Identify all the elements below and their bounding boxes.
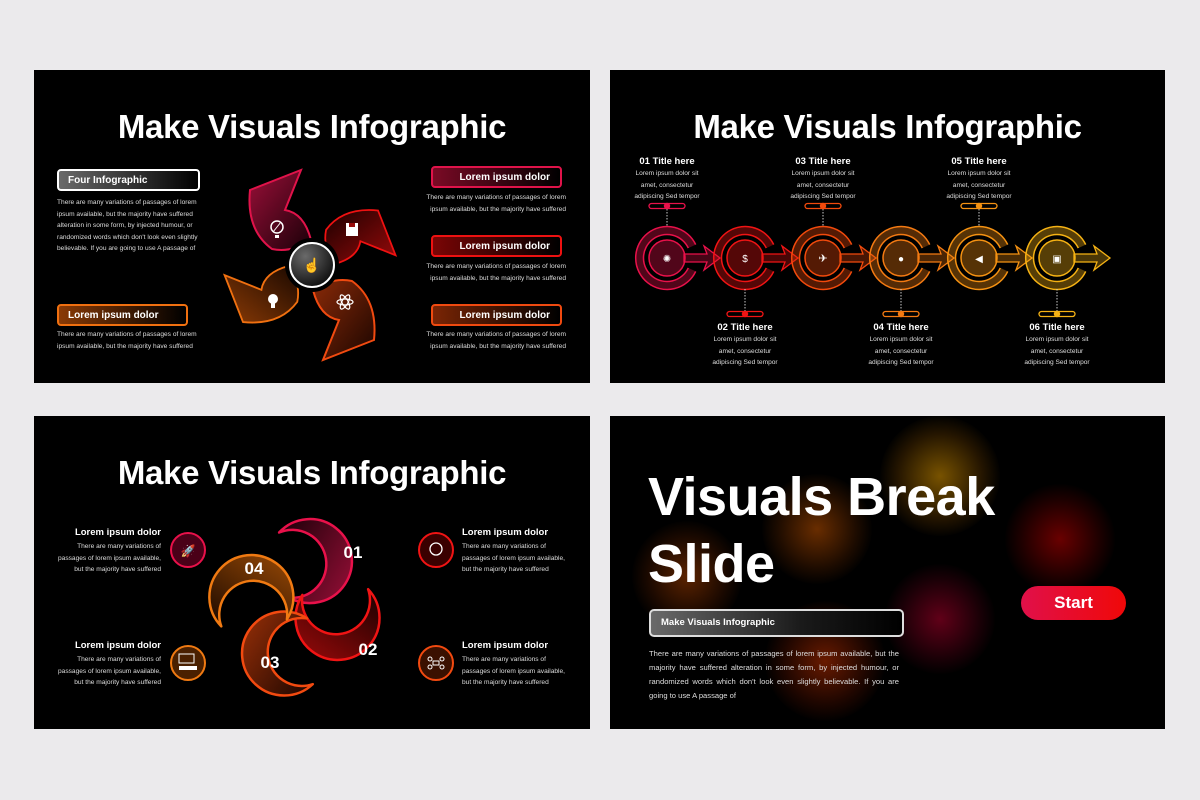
step 4 circle bbox=[870, 226, 954, 290]
crescent 03 bbox=[239, 609, 314, 699]
slide 2: process timeline: adipiscing Sed tempor bbox=[712, 359, 778, 366]
title: Make Visuals Infographic bbox=[693, 108, 1082, 145]
label box: right 2 bbox=[431, 235, 562, 257]
text block: top-right bbox=[462, 527, 565, 573]
slide 2: process timeline: 01 Title here bbox=[639, 156, 695, 167]
step 1 label bbox=[634, 156, 700, 200]
slide 2: process timeline: 02 Title here bbox=[717, 322, 773, 333]
label box: right 3 bbox=[431, 304, 562, 326]
label box: orange lorem: Lorem ipsum dolor bbox=[68, 310, 159, 321]
heading: Visuals Break Slide: Slide bbox=[648, 534, 775, 594]
slide 4: break slide bbox=[610, 416, 1165, 729]
glow blobs bbox=[636, 419, 1112, 717]
text block: top-left: There are many variations of passages of lorem ipsum available, but the majority have suffered bbox=[58, 543, 161, 573]
text block: top-right: There are many variations of passages of lorem ipsum available, but the majority have suffered bbox=[462, 543, 565, 573]
label box: right 2: Lorem ipsum dolor bbox=[459, 241, 550, 252]
icon circle: presentation bbox=[171, 646, 205, 680]
crescent 01: 01 bbox=[344, 543, 362, 562]
step 4 label bbox=[868, 322, 934, 366]
slide 2: process timeline bbox=[610, 70, 1165, 383]
step 2 circle bbox=[714, 226, 798, 290]
slide 2: process timeline: amet, consectetur bbox=[953, 182, 1005, 189]
icon circle: network bbox=[419, 646, 453, 680]
text block: right 1: There are many variations of passages of lorem ipsum available, but the majority have suffered bbox=[426, 194, 566, 213]
text block: bottom-right: There are many variations of passages of lorem ipsum available, but the majority have suffered bbox=[462, 656, 565, 686]
slide 2: process timeline: adipiscing Sed tempor bbox=[946, 193, 1012, 200]
slide 2: process timeline: amet, consectetur bbox=[641, 182, 693, 189]
icon circle: brain bbox=[419, 533, 453, 567]
center circle bbox=[285, 238, 339, 292]
connectors bbox=[667, 209, 1057, 311]
crescent 02 bbox=[293, 588, 383, 663]
step 5 circle bbox=[948, 226, 1032, 290]
icon: atom bbox=[337, 294, 353, 310]
blade: left orange bbox=[225, 266, 298, 323]
slide 2: process timeline: Lorem ipsum dolor sit bbox=[869, 336, 933, 343]
text block: bottom-left bbox=[58, 640, 161, 686]
slide 2: process timeline: adipiscing Sed tempor bbox=[790, 193, 856, 200]
slide 2: process timeline: adipiscing Sed tempor bbox=[868, 359, 934, 366]
slide 2: process timeline: adipiscing Sed tempor bbox=[634, 193, 700, 200]
step 5 label bbox=[946, 156, 1012, 200]
icon: book bbox=[346, 223, 358, 236]
icon: bulb bbox=[268, 294, 278, 308]
button: Start bbox=[1021, 586, 1126, 620]
step 2 label bbox=[712, 322, 778, 366]
step 2 circle: $ bbox=[742, 254, 748, 265]
step 1 circle bbox=[636, 226, 720, 290]
text block: left description: There are many variations of passages of lorem ipsum available, but the majority have suffered alteration in some form, by injected humour, or randomized words which don't look even slightly believable. If you are going to use A passage of bbox=[57, 199, 198, 252]
icon circle: rocket: 🚀 bbox=[181, 544, 196, 558]
slide 2: process timeline: adipiscing Sed tempor bbox=[1024, 359, 1090, 366]
crescent 02: 02 bbox=[359, 640, 377, 659]
button: Start: Start bbox=[1054, 593, 1093, 612]
step 6 circle: ▣ bbox=[1052, 254, 1062, 265]
title: Make Visuals Infographic bbox=[118, 108, 506, 145]
slide 2: process timeline: 06 Title here bbox=[1029, 322, 1085, 333]
text block: orange description: There are many variations of passages of lorem ipsum available, but the majority have suffered bbox=[57, 331, 197, 350]
text block: top-left: Lorem ipsum dolor bbox=[75, 527, 161, 538]
slide 2: process timeline: 04 Title here bbox=[873, 322, 929, 333]
text block: description: There are many variations of passages of lorem ipsum available, but the majority have suffered alteration in some form, by injected humour, or randomized words which don't look even slightly believable. If you are going to use A passage of bbox=[649, 649, 899, 700]
blade: right red bbox=[325, 210, 396, 264]
step 6 label bbox=[1024, 322, 1090, 366]
text block: top-left bbox=[58, 527, 161, 573]
text block: bottom-left: There are many variations of passages of lorem ipsum available, but the majority have suffered bbox=[58, 656, 161, 686]
label box: Four Infographic: Four Infographic bbox=[68, 175, 147, 186]
blade: top crimson bbox=[249, 170, 311, 250]
step 3 circle bbox=[792, 226, 876, 290]
slide 1: pinwheel infographic bbox=[34, 70, 590, 383]
icon: globe bbox=[271, 221, 283, 238]
label box: Make Visuals Infographic: Make Visuals Infographic bbox=[661, 617, 775, 628]
slide 2: process timeline: Lorem ipsum dolor sit bbox=[1025, 336, 1089, 343]
center circle: ☝ bbox=[303, 256, 321, 274]
text block: right 3: There are many variations of passages of lorem ipsum available, but the majority have suffered bbox=[426, 331, 566, 350]
label box: Make Visuals Infographic bbox=[649, 609, 904, 637]
icon circle: rocket bbox=[171, 533, 205, 567]
text block: bottom-right bbox=[462, 640, 565, 686]
slide 2: process timeline: Lorem ipsum dolor sit bbox=[791, 170, 855, 177]
step 6 circle bbox=[1026, 226, 1110, 290]
blade: bottom orange-red bbox=[313, 280, 375, 360]
slide 2: process timeline: amet, consectetur bbox=[719, 348, 771, 355]
slide 2: process timeline: amet, consectetur bbox=[1031, 348, 1083, 355]
slide 3: crescent cycle bbox=[34, 416, 590, 729]
title: Make Visuals Infographic bbox=[118, 454, 506, 491]
heading: Visuals Break Slide: Visuals Break bbox=[648, 467, 995, 527]
crescent 04: 04 bbox=[245, 559, 264, 578]
slide 2: process timeline: Lorem ipsum dolor sit bbox=[713, 336, 777, 343]
slide 2: process timeline: 05 Title here bbox=[951, 156, 1007, 167]
crescent 04 bbox=[205, 551, 296, 627]
label box: right 3: Lorem ipsum dolor bbox=[459, 310, 550, 321]
step 3 label bbox=[790, 156, 856, 200]
label box: right 1: Lorem ipsum dolor bbox=[459, 172, 550, 183]
slide 2: process timeline: amet, consectetur bbox=[875, 348, 927, 355]
label box: orange lorem bbox=[57, 304, 188, 326]
crescent 01 bbox=[278, 513, 362, 607]
text block: bottom-left: Lorem ipsum dolor bbox=[75, 640, 161, 651]
slide 2: process timeline: 03 Title here bbox=[795, 156, 851, 167]
step 3 circle: ✈ bbox=[818, 253, 828, 265]
label box: right 1 bbox=[431, 166, 562, 188]
text block: bottom-right: Lorem ipsum dolor bbox=[462, 640, 548, 651]
slide 2: process timeline: amet, consectetur bbox=[797, 182, 849, 189]
step 4 circle: ● bbox=[898, 254, 904, 265]
slide 2: process timeline: Lorem ipsum dolor sit bbox=[947, 170, 1011, 177]
text block: right 2: There are many variations of passages of lorem ipsum available, but the majority have suffered bbox=[426, 263, 566, 282]
step 5 circle: ◀ bbox=[975, 254, 983, 265]
step 1 circle: ✺ bbox=[663, 254, 671, 265]
heading: Visuals Break Slide bbox=[648, 467, 996, 594]
pinwheel chart bbox=[223, 168, 398, 362]
slide 2: process timeline: Lorem ipsum dolor sit bbox=[635, 170, 699, 177]
text block: top-right: Lorem ipsum dolor bbox=[462, 527, 548, 538]
crescent 03: 03 bbox=[261, 653, 279, 672]
label box: Four Infographic bbox=[57, 169, 200, 191]
marker bars bbox=[649, 203, 1075, 317]
